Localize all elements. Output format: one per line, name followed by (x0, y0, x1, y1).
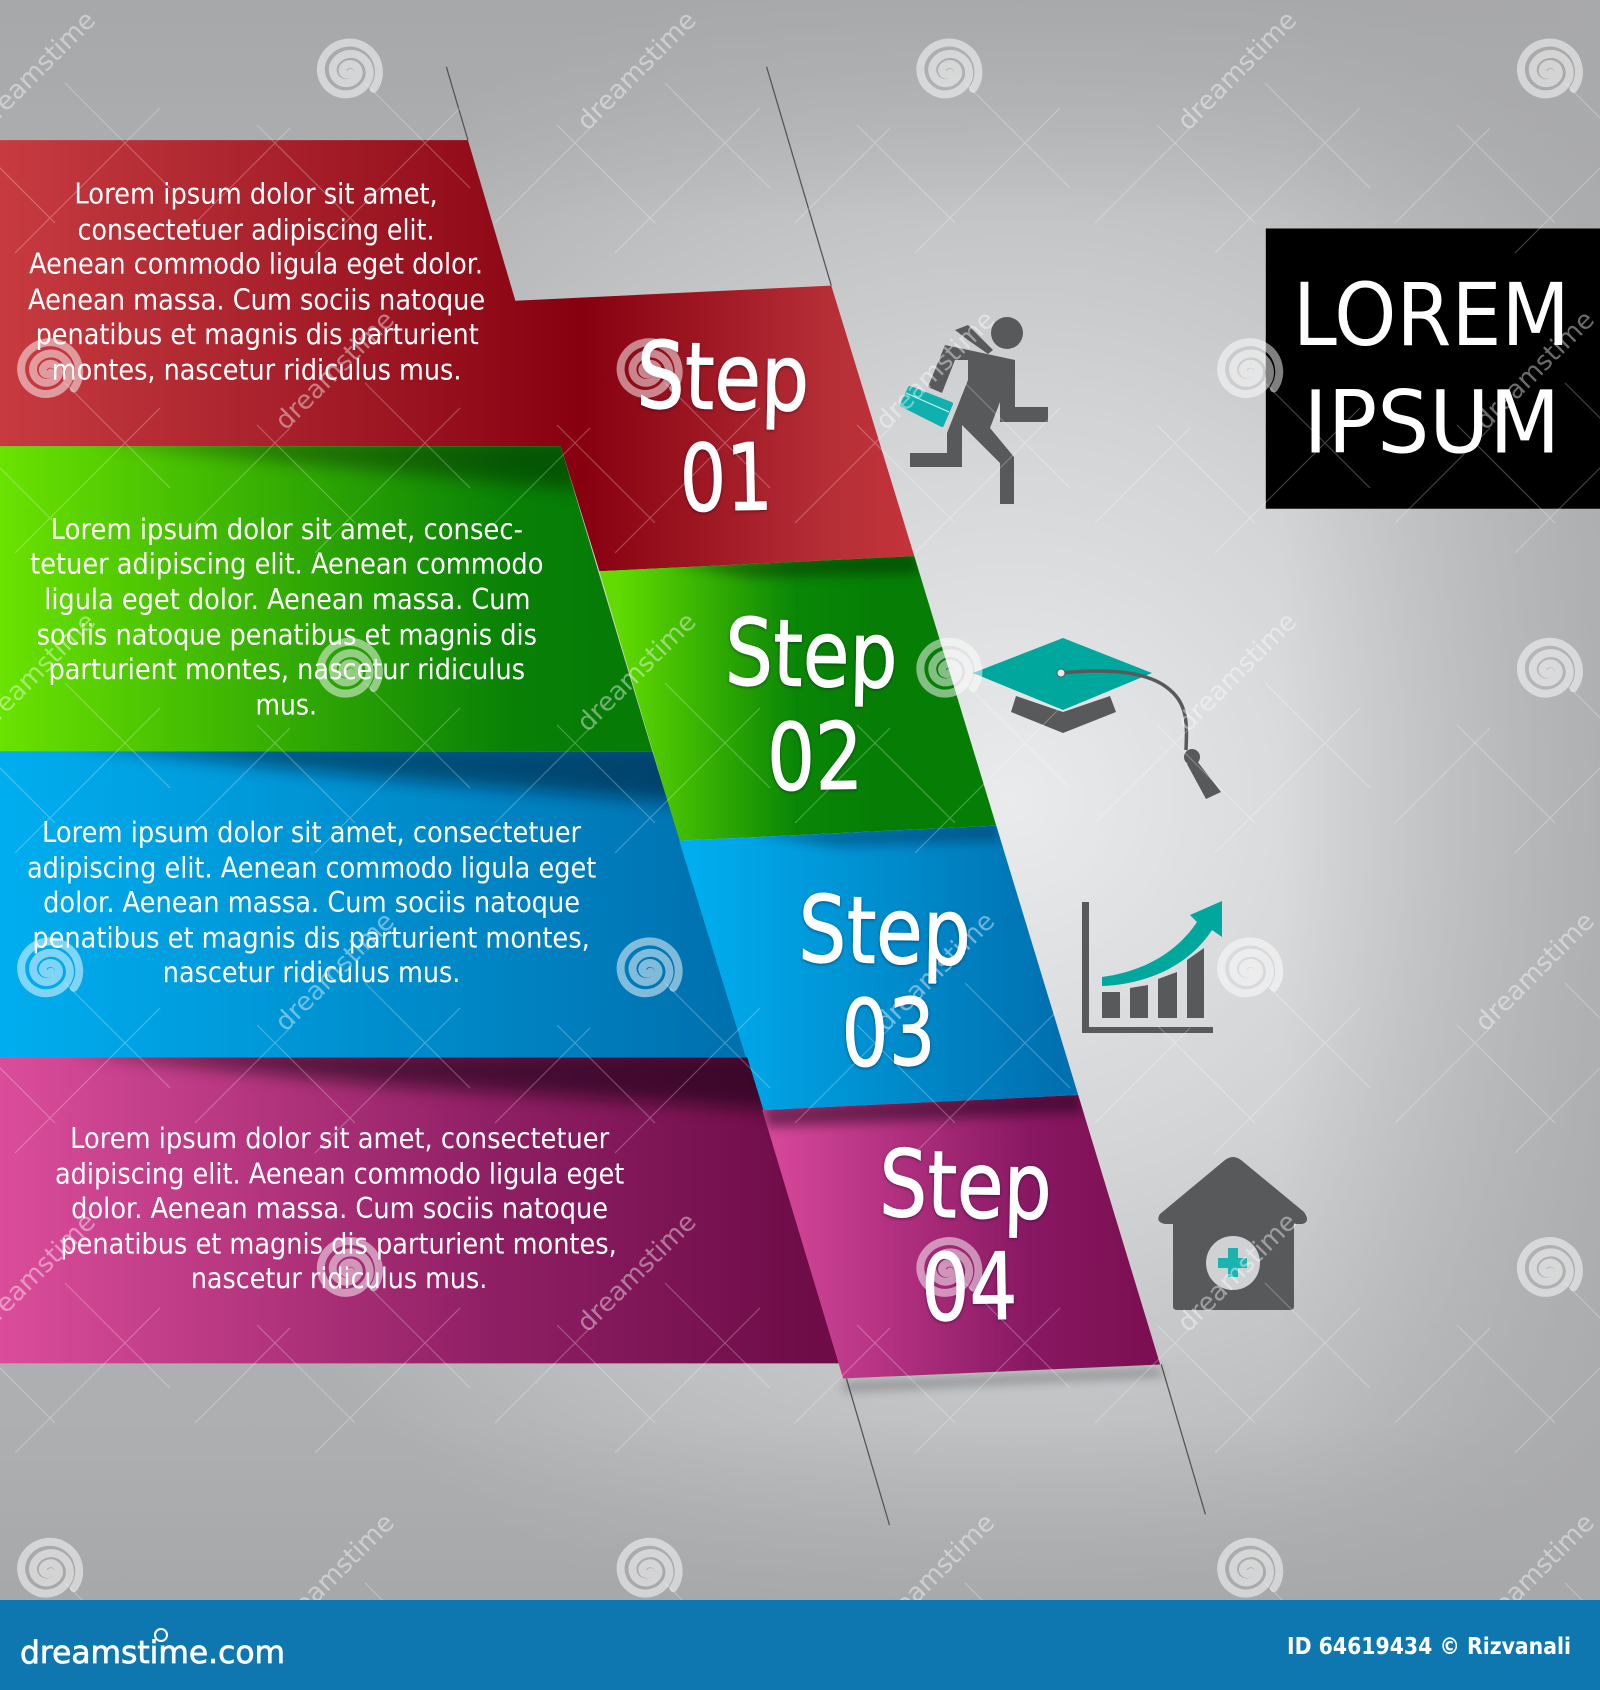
watermark: dreamstime (269, 906, 401, 1037)
text: green panel: Lorem ipsum dolor sit amet, consec- (51, 513, 523, 546)
text: purple panel: nascetur ridiculus mus. (191, 1262, 487, 1295)
title box: LOREM IPSUM: LOREM (1293, 266, 1570, 366)
title box: LOREM IPSUM (1266, 228, 1600, 509)
label: step 04 (878, 1130, 1053, 1342)
watermark: dreamstime (870, 1508, 1001, 1639)
text: red panel (28, 178, 485, 386)
label: step 02: 02 (766, 702, 864, 812)
text: purple panel (55, 1122, 624, 1295)
label: step 03: 03 (841, 978, 936, 1088)
watermark: dreamstime (571, 5, 702, 136)
label: step 01 (636, 321, 810, 533)
watermark: dreamstime (1469, 305, 1600, 436)
watermark: dreamstime (870, 305, 1001, 436)
watermark: dreamstime (1172, 1207, 1303, 1338)
text: blue panel: dolor. Aenean massa. Cum sociis natoque (43, 886, 580, 919)
label: step 04: 04 (920, 1233, 1018, 1342)
icon: medical house (1158, 1157, 1307, 1310)
icon: growth chart (1082, 901, 1222, 1033)
label: step 02 (724, 598, 899, 812)
text: green panel (30, 513, 543, 722)
text: blue panel: adipiscing elit. Aenean commodo ligula eget (27, 851, 596, 884)
panel: green text block (0, 440, 652, 751)
footer bar (0, 1600, 1600, 1690)
label: step 01: 01 (679, 423, 773, 533)
watermark: dreamstime (1172, 607, 1303, 738)
text: red panel: Lorem ipsum dolor sit amet, (74, 178, 438, 211)
watermark: dreamstime (1172, 5, 1303, 136)
label: step 03: Step (797, 875, 972, 986)
text: purple panel: dolor. Aenean massa. Cum sociis natoque (71, 1192, 608, 1225)
text: green panel: tetuer adipiscing elit. Aenean commodo (30, 547, 543, 580)
text: green panel: mus. (256, 689, 317, 722)
label: step 04: Step (878, 1130, 1053, 1241)
text: blue panel: penatibus et magnis dis parturient montes, (32, 921, 590, 954)
fold slits (446, 67, 1205, 1525)
panel: blue text block (0, 744, 746, 1057)
watermark: dreamstime (571, 607, 702, 738)
icon: graduation cap (973, 638, 1221, 799)
text: red panel: montes, nascetur ridiculus mus. (52, 353, 461, 386)
watermark: dreamstime (571, 1207, 702, 1338)
watermark: dreamstime (269, 1508, 401, 1639)
footer credit: ID 64619434 © Rizvanali (1287, 1634, 1571, 1660)
footer logo: dreamstime.com (20, 1635, 285, 1671)
label: step 02: Step (724, 598, 899, 709)
text: blue panel (27, 816, 596, 989)
label: step 03 (797, 875, 972, 1088)
panel: step 03 blue (679, 821, 1078, 1110)
label: step 01: Step (636, 321, 810, 432)
watermark: dreamstime (1469, 1508, 1600, 1639)
text: green panel: parturient montes, nascetur ridiculus (49, 653, 525, 686)
title box: LOREM IPSUM: IPSUM (1304, 374, 1560, 474)
text: purple panel: penatibus et magnis dis parturient montes, (60, 1227, 617, 1260)
text: purple panel: adipiscing elit. Aenean commodo ligula eget (55, 1157, 624, 1190)
watermark: dreamstime (1469, 906, 1600, 1037)
text: red panel: penatibus et magnis dis parturient (36, 318, 479, 351)
panel: step 04 purple (762, 1091, 1162, 1390)
watermark: dreamstime (870, 906, 1001, 1037)
text: red panel: Aenean commodo ligula eget dolor. (29, 248, 483, 281)
text: red panel: consectetuer adipiscing elit. (78, 213, 435, 246)
text: red panel: Aenean massa. Cum sociis natoque (28, 283, 485, 316)
text: green panel: ligula eget dolor. Aenean massa. Cum (44, 583, 530, 616)
panel: step 01 red ribbon (0, 140, 914, 571)
text: green panel: sociis natoque penatibus et magnis dis (37, 619, 537, 652)
panel: purple text block (0, 1051, 841, 1363)
watermark: dreamstime (269, 305, 401, 436)
text: purple panel: Lorem ipsum dolor sit amet, consectetuer (70, 1122, 610, 1155)
text: blue panel: Lorem ipsum dolor sit amet, consectetuer (42, 816, 582, 849)
panel: step 02 green (599, 552, 996, 841)
icon: running businessman (902, 317, 1048, 504)
text: blue panel: nascetur ridiculus mus. (163, 956, 460, 989)
